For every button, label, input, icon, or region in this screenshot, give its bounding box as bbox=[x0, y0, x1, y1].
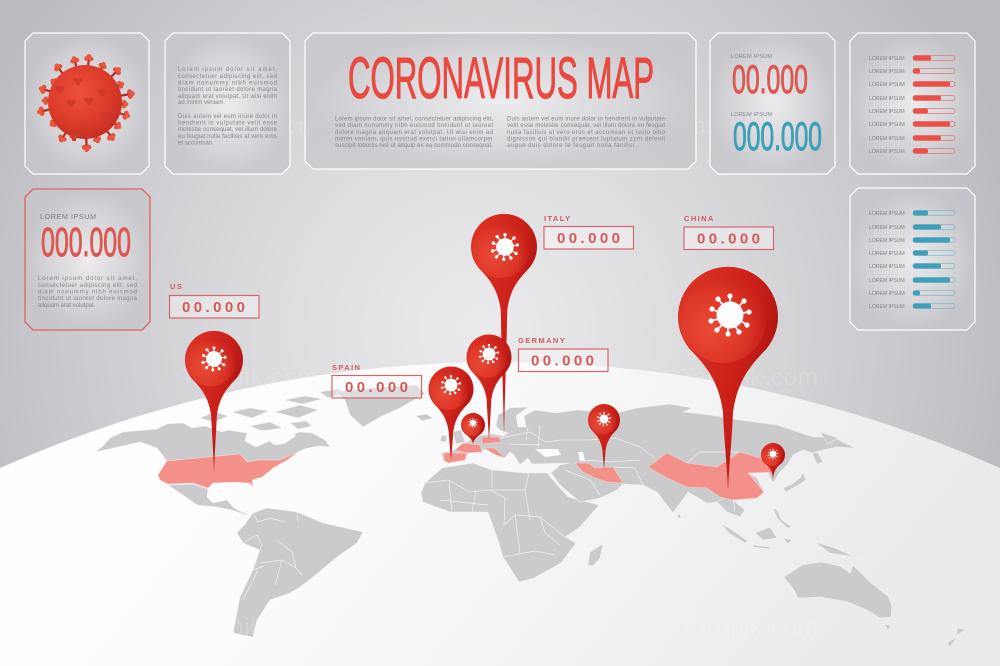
panel: intro text bbox=[165, 33, 290, 174]
text block bbox=[178, 67, 278, 146]
bar list: LOREM IPSUM bbox=[869, 82, 905, 88]
callout: spain bbox=[332, 363, 422, 398]
bar list: LOREM IPSUM bbox=[869, 122, 905, 128]
south america bbox=[233, 508, 363, 637]
bar list: LOREM IPSUM bbox=[869, 211, 905, 217]
text block: left column: suscipit lobortis nisl ut aliquip ex ea commodo consequat. bbox=[335, 143, 493, 149]
watermarks bbox=[180, 113, 818, 641]
callout: spain: SPAIN bbox=[332, 363, 361, 372]
text block: left column: minim veniam, quis nostrud exerci tation ullamcorper bbox=[335, 136, 493, 142]
red stat bbox=[731, 54, 808, 102]
text block: molestie consequat, vel illum dolore bbox=[178, 127, 278, 133]
highlighted germany bbox=[482, 437, 501, 444]
red stat: 00.000 bbox=[732, 58, 808, 102]
callout: italy: 00.000 bbox=[557, 230, 620, 247]
pin: spain bbox=[428, 366, 474, 460]
watermarks: Tarhpik.com bbox=[180, 614, 318, 641]
text block: left column bbox=[335, 116, 493, 149]
pin: italy bbox=[471, 214, 537, 435]
bar list: LOREM IPSUM bbox=[869, 109, 905, 115]
callout: us: US bbox=[170, 282, 183, 291]
globe bbox=[0, 362, 1000, 666]
text block: diam nonummy nibh euismod bbox=[178, 80, 277, 86]
callout: spain: 00.000 bbox=[345, 379, 408, 396]
madagascar bbox=[588, 544, 603, 566]
east asian islands bbox=[677, 432, 865, 562]
panel: global total bbox=[25, 189, 150, 330]
callout: italy bbox=[544, 214, 634, 249]
panel: totals bbox=[710, 33, 835, 174]
bar list: LOREM IPSUM bbox=[869, 225, 905, 231]
panel: blue bars bbox=[850, 188, 975, 330]
pin: us bbox=[185, 331, 243, 472]
text block: tincidunt ut laoreet dolore magna bbox=[178, 87, 278, 93]
north america: canada and alaska bbox=[95, 389, 345, 462]
panel label: LOREM IPSUM bbox=[40, 212, 96, 221]
bar list bbox=[869, 210, 955, 310]
text block: Lorem ipsum dolor sit amet, bbox=[38, 276, 137, 282]
text block: eu feugiat nulla facilisis at vero eros bbox=[178, 134, 277, 140]
text block: aliquam erat volutpat. Ut wisi enim bbox=[178, 94, 277, 100]
callout: us: 00.000 bbox=[182, 299, 245, 316]
blue stat: LOREM IPSUM bbox=[731, 112, 772, 118]
highlighted spain bbox=[444, 453, 467, 463]
pin: china bbox=[678, 267, 778, 490]
text block: left column: Lorem ipsum dolor sit amet, consectetuer adipiscing elit, bbox=[335, 116, 493, 122]
blue stat: 000.000 bbox=[733, 115, 822, 159]
mexico and central america bbox=[168, 484, 250, 515]
highlighted iran bbox=[575, 463, 623, 483]
bar list: LOREM IPSUM bbox=[869, 251, 905, 257]
text block: left column: sed diam nonummy nibh euismod tincidunt ut laoreet bbox=[335, 123, 493, 129]
text block: right column bbox=[507, 116, 666, 149]
bar list: LOREM IPSUM bbox=[869, 69, 905, 75]
highlighted france bbox=[455, 443, 482, 453]
world map bbox=[95, 385, 966, 647]
panel: virus bbox=[25, 33, 149, 174]
callout: germany bbox=[518, 336, 608, 372]
callout: italy: ITALY bbox=[544, 214, 571, 223]
text block: consectetuer adipiscing elit, sed bbox=[38, 283, 137, 289]
bar list: LOREM IPSUM bbox=[869, 149, 905, 155]
callout: germany: GERMANY bbox=[518, 336, 566, 345]
callout: china bbox=[684, 214, 774, 250]
big number: 000.000 bbox=[41, 219, 131, 265]
pin: germany bbox=[466, 334, 512, 440]
greenland bbox=[336, 385, 425, 427]
watermarks: Tarhpik.com bbox=[180, 113, 318, 140]
highlighted italy bbox=[484, 448, 505, 458]
text block bbox=[38, 276, 138, 309]
text block: consectetuer adipiscing elit, sed bbox=[178, 74, 277, 80]
bar list: LOREM IPSUM bbox=[869, 238, 905, 244]
watermarks: Tarhpik.com bbox=[680, 113, 818, 140]
callout: china: 00.000 bbox=[697, 230, 760, 248]
blue stat bbox=[731, 112, 822, 159]
watermarks: Tarhpik.com bbox=[680, 614, 818, 641]
highlighted usa bbox=[158, 452, 298, 488]
text block: right column: nulla facilisis at vero eros et accumsan et iusto odio bbox=[507, 130, 666, 136]
bar list: LOREM IPSUM bbox=[869, 136, 905, 142]
text block: right column: Duis autem vel eum iriure dolor in hendrerit in vulputate bbox=[507, 116, 666, 122]
text block: Lorem ipsum dolor sit amet, bbox=[178, 67, 277, 73]
bar list: LOREM IPSUM bbox=[869, 278, 905, 284]
bar list: LOREM IPSUM bbox=[869, 291, 905, 297]
bar list: LOREM IPSUM bbox=[869, 96, 905, 102]
bar list: LOREM IPSUM bbox=[869, 264, 905, 270]
pin: iran bbox=[588, 404, 620, 470]
text block: ad minim veniam. bbox=[178, 100, 225, 106]
highlighted china bbox=[648, 452, 773, 500]
pin: korea bbox=[761, 443, 785, 479]
bar list: LOREM IPSUM bbox=[869, 304, 905, 310]
callout: china: CHINA bbox=[684, 214, 715, 223]
callout: us bbox=[170, 282, 259, 318]
callout: germany: 00.000 bbox=[531, 352, 594, 370]
africa bbox=[421, 463, 599, 582]
watermarks: Tarhpik.com bbox=[680, 364, 818, 391]
red stat: LOREM IPSUM bbox=[731, 54, 772, 60]
text block: aliquam erat volutpat. bbox=[38, 303, 96, 309]
text block: right column: dignissim qui blandit praesent luptatum zzril delenit bbox=[507, 136, 665, 142]
text block: hendrerit in vulputate velit esse bbox=[178, 120, 278, 126]
pin: france bbox=[461, 413, 485, 444]
panel: red bars bbox=[850, 33, 975, 174]
text block: tincidunt ut laoreet dolore magna bbox=[38, 296, 138, 302]
bar list bbox=[869, 56, 955, 155]
text block: left column: dolore magna aliquam erat volutpat. Ut wisi enim ad bbox=[335, 130, 493, 136]
icon: coronavirus bbox=[36, 54, 136, 152]
text block: Duis autem vel eum iriure dolor in bbox=[178, 114, 277, 120]
bar list: LOREM IPSUM bbox=[869, 56, 905, 62]
text block: et accumsan. bbox=[178, 140, 214, 146]
text block: right column: augue duis dolore te feugait nulla facilisi. bbox=[507, 143, 636, 149]
eurasia bbox=[440, 404, 855, 517]
text block: diam nonummy nibh euismod bbox=[38, 290, 137, 296]
australia bbox=[784, 562, 892, 618]
title: CORONAVIRUS MAP bbox=[348, 46, 654, 111]
watermarks: Tarhpik.com bbox=[180, 364, 318, 391]
text block: right column: velit esse molestie consequat, vel illum dolore eu feugiat bbox=[507, 123, 665, 129]
panel: title bbox=[305, 33, 696, 169]
